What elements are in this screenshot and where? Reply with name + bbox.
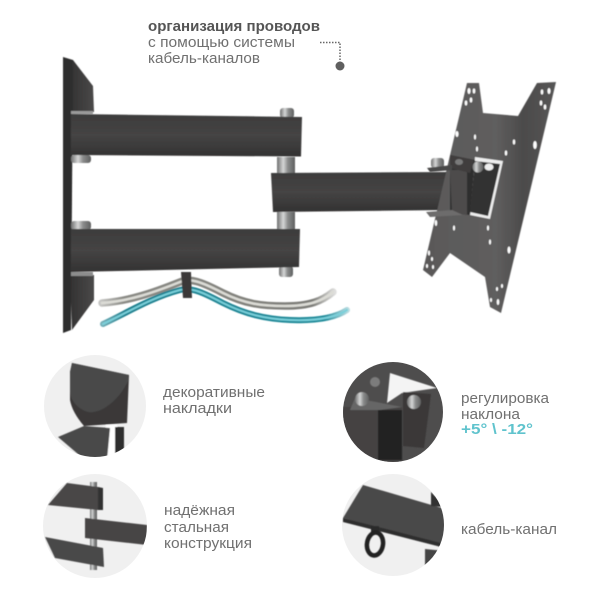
label: steel construction	[164, 503, 252, 552]
middle arm	[271, 172, 450, 212]
cables	[102, 280, 347, 324]
mounting holes	[426, 88, 550, 305]
wall plate	[63, 57, 94, 333]
detail circle: cable channel	[342, 474, 445, 576]
callout leader line with dot	[320, 42, 344, 70]
cable clip	[181, 272, 192, 298]
label: tilt adjustment	[461, 391, 550, 438]
label: tilt adjustment: +5° \ -12°	[461, 422, 533, 438]
label: tilt adjustment: наклона	[461, 407, 521, 423]
callout heading: cable organisation: организация проводов	[148, 19, 320, 35]
callout heading: cable organisation: с помощью системы	[148, 35, 295, 51]
label: cable channel: кабель-канал	[461, 522, 557, 538]
lower and upper hinge bolts at the wall	[71, 111, 93, 276]
wall mount bracket with arms	[63, 57, 450, 333]
label: decorative covers	[163, 385, 265, 417]
detail circle: decorative covers	[44, 355, 146, 460]
label: steel construction: конструкция	[164, 536, 252, 552]
infographic	[43, 23, 556, 578]
label: steel construction: надёжная	[164, 503, 235, 519]
label: tilt adjustment: регулировка	[461, 391, 550, 407]
lower arm	[71, 229, 300, 272]
pivot bolts of middle arm	[426, 158, 463, 217]
arm pivot bolts	[277, 108, 295, 277]
detail circle: steel construction	[43, 474, 147, 578]
VESA plate with tilt bracket	[423, 82, 556, 313]
upper arm	[71, 114, 302, 156]
tilt bracket	[450, 155, 503, 219]
callout heading: cable organisation: кабель-каналов	[148, 51, 260, 67]
callout heading: cable organisation	[148, 19, 320, 67]
label: decorative covers: декоративные	[163, 385, 265, 401]
label: decorative covers: накладки	[163, 401, 232, 417]
detail circle: tilt adjustment	[343, 362, 443, 462]
label: steel construction: стальная	[164, 520, 229, 536]
